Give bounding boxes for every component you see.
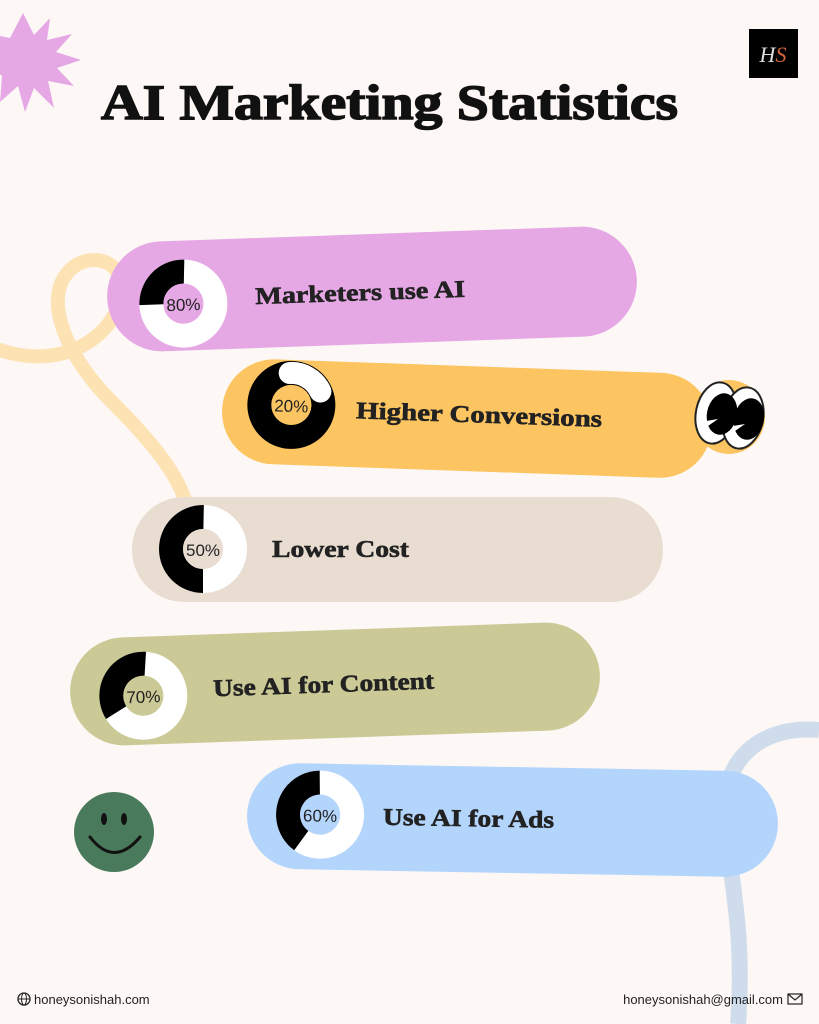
icon: smiley xyxy=(74,792,154,872)
label: Higher Conversions xyxy=(356,398,602,433)
donut 70%: 70% xyxy=(126,687,161,707)
label: Lower Cost xyxy=(272,537,409,563)
logo: HS xyxy=(759,42,786,67)
footer: email: honeysonishah@gmail.com xyxy=(623,992,783,1007)
icon: eyes xyxy=(690,379,769,454)
panel: Use AI for Content xyxy=(68,621,602,747)
label: Use AI for Ads xyxy=(383,805,554,834)
decorative yellow loop line xyxy=(0,260,185,500)
logo xyxy=(749,29,798,78)
donut 60%: 60% xyxy=(303,806,337,826)
donut 80% xyxy=(150,270,216,337)
icon: pink starburst xyxy=(0,13,81,112)
label: Use AI for Content xyxy=(213,669,434,702)
footer: website: honeysonishah.com xyxy=(34,992,150,1007)
panel: Higher Conversions xyxy=(220,358,714,480)
donut 20%: 20% xyxy=(274,396,309,417)
panel: Marketers use AI xyxy=(105,225,639,353)
donut 50%: 50% xyxy=(186,541,220,560)
panel: Use AI for Ads xyxy=(246,762,779,878)
donut 70% xyxy=(98,650,189,741)
panel: Lower Cost xyxy=(132,497,663,602)
donut 50% xyxy=(171,517,235,581)
donut 60% xyxy=(275,769,365,860)
donut 80%: 80% xyxy=(166,295,201,315)
label: Marketers use AI xyxy=(255,277,466,310)
decorative blue curve xyxy=(725,730,819,1024)
donut 20% xyxy=(255,369,327,441)
title: AI Marketing Statistics xyxy=(101,74,678,130)
